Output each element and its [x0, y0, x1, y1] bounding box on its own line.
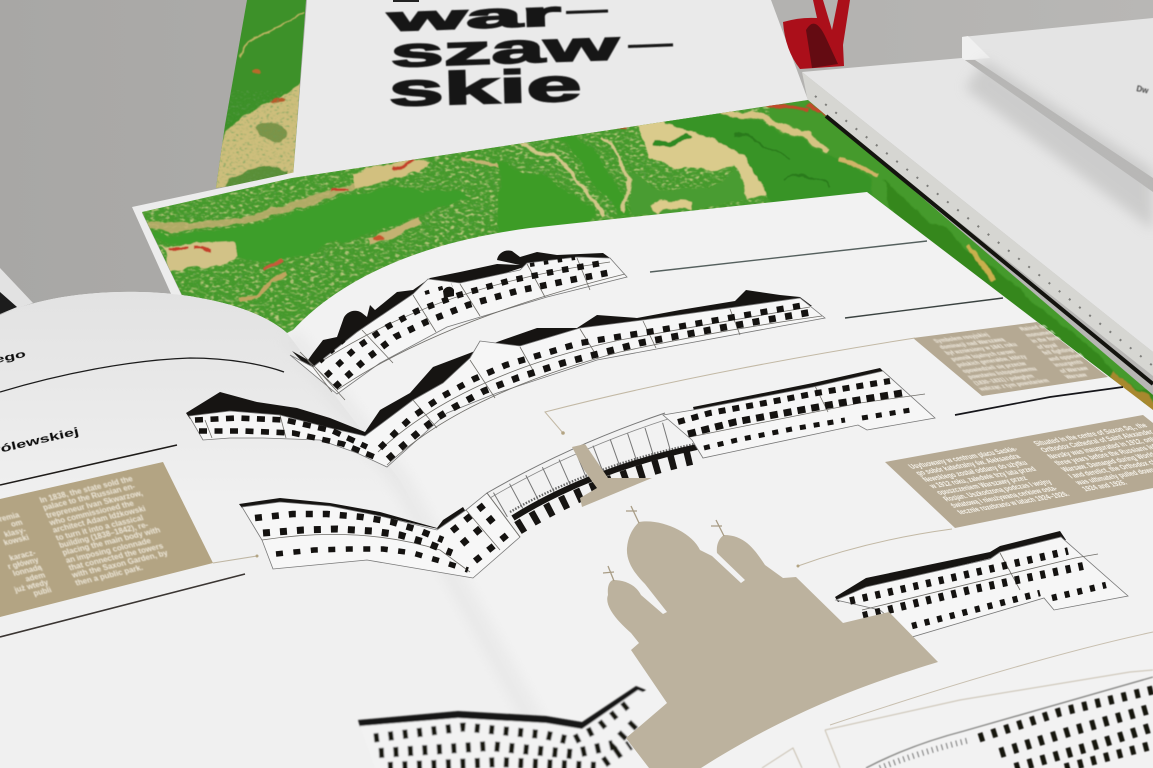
small white book with black edge, left [0, 268, 33, 314]
panel text, English column: who commissioned the [47, 499, 136, 528]
church silhouette, beige [603, 506, 938, 768]
panel text [931, 330, 1054, 393]
white edge of marbled book [132, 172, 296, 296]
colonnade [487, 413, 700, 528]
panel text, English column: building (1838–1842), re- [58, 520, 150, 550]
panel text, Polish column fragment [0, 510, 54, 602]
panel text, English column [1030, 421, 1153, 493]
building 1: palace with domes [290, 250, 627, 400]
panel text, Polish column fragment: klasy- [3, 525, 28, 539]
binder black gap line [826, 116, 1153, 384]
leader line from the building to the text panel [545, 338, 915, 435]
building 3: Saxon Palace with colonnade [239, 368, 935, 578]
building 4: right palace behind church [835, 531, 1128, 637]
building 6: bottom right palace [762, 670, 1153, 768]
panel text, Polish column [905, 445, 1072, 516]
panel text, English column [1018, 322, 1103, 381]
panel text, English column: an imposing colonnade [64, 536, 153, 565]
sheet heading fragment: Dw [1136, 84, 1150, 96]
panel text, English column: monument [1024, 329, 1058, 339]
title: warszawskie: skie [388, 59, 582, 116]
title: warszawskie: szaw [390, 22, 619, 76]
panel: upper right beige text box [913, 322, 1108, 396]
panel text, English column [37, 473, 175, 588]
title: warszawskie: war [385, 0, 561, 39]
panel text, Polish column: światową i nieużywaną cerkiew osta- [948, 484, 1061, 510]
panel text, Polish column: Newskiego został oddany do użytku [920, 459, 1030, 484]
marble speckle texture [142, 106, 770, 332]
panel text, English column: then a public park. [74, 563, 144, 587]
panel text: dominacji nad Warszawą [938, 337, 1007, 351]
panel text, English column: architect Adam Idźkowski [51, 504, 147, 535]
rule lines on the pages [0, 241, 1153, 725]
marbled back book, top left strip [216, 0, 306, 188]
open book pages [0, 192, 1153, 768]
panel: left beige text box [0, 462, 213, 617]
panel text, Polish column fragment: r główny [6, 555, 41, 571]
panel text, Polish column fragment: już wtedy [12, 578, 50, 595]
panel text, Polish column: tecznie rozebrano w latach 1924–1926. [955, 490, 1072, 516]
panel text, Polish column: go sobór katedralny św. Aleksandra [913, 452, 1023, 477]
upper white sheet, top right [962, 18, 1153, 178]
panel text, Polish column: w 1912 roku, zaledwie trzy lata przed [926, 465, 1039, 490]
panel text, Polish column: Rosjan. Uszkodzoną podczas I wojny [941, 478, 1055, 503]
right wing [693, 368, 884, 414]
marble swirls [150, 105, 1153, 440]
title: warszawskie [385, 0, 673, 116]
panel text: Symbolem rosyjskiej [932, 332, 991, 345]
panel text, English column: in the form [1029, 335, 1063, 345]
panel text: pomnik lojalnych carowi [949, 349, 1017, 363]
panel text, English column: fell fighting [1041, 347, 1075, 357]
monument obelisk, beige [572, 444, 652, 507]
panel text, Polish column: Usytuowany w centrum placu Saskie- [906, 445, 1021, 471]
panel text, Polish column fragment: om [9, 518, 24, 529]
panel text, Polish column fragment: adem [24, 570, 47, 584]
panel text, English column: with the Saxon Garden, by [69, 548, 170, 580]
panel text, English column: Orthodox Cathedral of Saint Alexander [1038, 428, 1153, 454]
panel text, English column: and opposed [1047, 352, 1086, 363]
panel text, English column: that connected the towers [67, 541, 165, 572]
panel text, English column: Situated in the centre of Saxon Sq., the [1031, 421, 1150, 448]
church crosses [603, 506, 724, 581]
panel text, English column: of loyal [1035, 342, 1060, 351]
panel text, English column: palace to the Russian en- [41, 482, 137, 512]
panel text, Polish column fragment: kowski [2, 533, 30, 547]
white binder box [802, 58, 1153, 376]
panel text: powstaniu listopadowemu [966, 366, 1039, 381]
panel text, English column: 1924 and 1926. [1080, 479, 1130, 493]
building 5: bottom left palace [358, 686, 668, 768]
panel text, English column: trepreneur Ivan Skwarzow, [45, 488, 144, 520]
panel text: opowiedzieli się przeciw [961, 361, 1029, 375]
panel text, English column: to turn it into a classical [54, 513, 145, 542]
red ribbon [783, 0, 850, 69]
panel text, English column: placing the main body with [61, 526, 162, 557]
binder spine [802, 72, 1153, 376]
panel text, English column: insurgents [1052, 359, 1086, 369]
leader line to the cathedral panel [796, 529, 952, 568]
panel text: (1830–1831) i poległym [972, 373, 1036, 387]
panel text, English column: Raised on [1018, 324, 1049, 333]
panel text: polskich generałów, którzy [955, 354, 1029, 369]
panel text, Polish column fragment: karacz- [8, 548, 37, 563]
left page shade [0, 292, 560, 768]
panel text, Polish column fragment: publi [32, 585, 53, 598]
panel text, English column: of Warsaw [1058, 365, 1091, 375]
panel text, Polish column fragment: lonnadą [11, 563, 44, 578]
panel text, English column: In 1838, the state sold the [38, 474, 135, 505]
leader line to the colonnade building [213, 554, 258, 563]
white title cover [293, 0, 808, 178]
panel text: był wzniesiony w 1841 roku [943, 342, 1019, 357]
panel text: walcząc z tym powstaniem [977, 378, 1052, 393]
building 2: long palace across the fold [186, 290, 825, 467]
panel text, English column: Warsaw [1064, 372, 1090, 381]
panel: cathedral beige text box [885, 415, 1153, 528]
panel text, Polish column: opuszczeniem Warszawy przez [934, 474, 1030, 497]
marbled green cover of the book [142, 100, 1153, 410]
